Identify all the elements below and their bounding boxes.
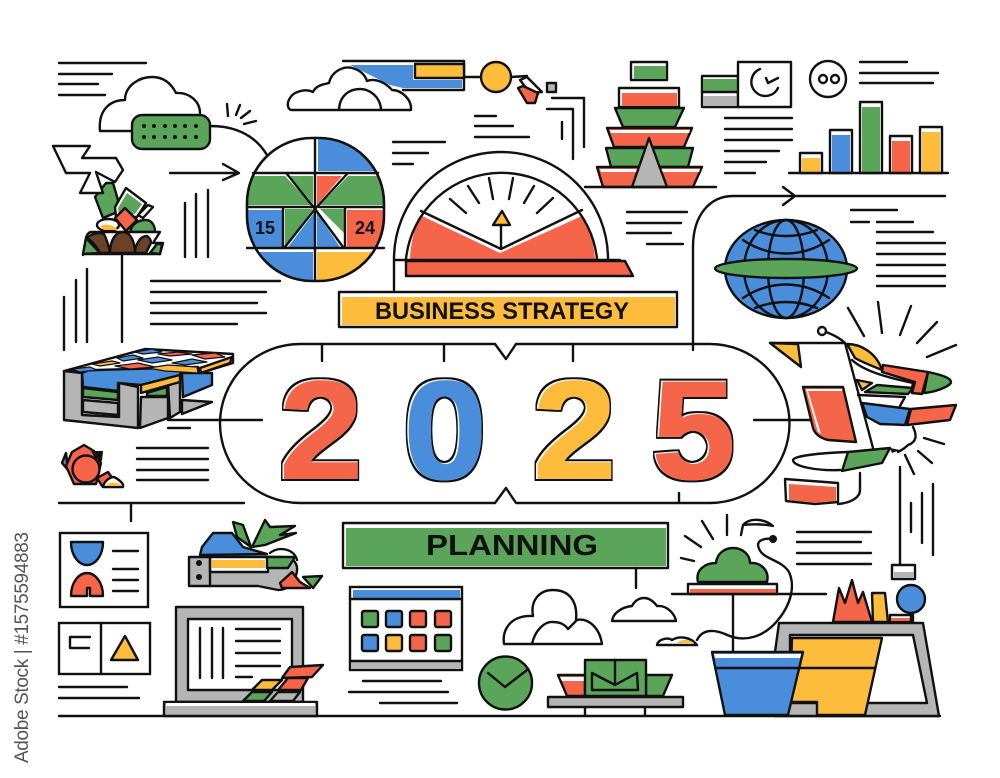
text block: under calendar xyxy=(349,681,457,703)
icon: red blob with yellow tail xyxy=(62,445,123,487)
banner: BUSINESS STRATEGY: BUSINESS STRATEGY xyxy=(375,298,629,325)
text block: top right xyxy=(860,62,938,83)
icon: calendar xyxy=(350,587,462,670)
text block: lower left xyxy=(59,687,139,698)
icon: clock and green box xyxy=(702,62,791,107)
icon: cloud outline top centre xyxy=(288,68,411,110)
card: people profile xyxy=(60,533,148,607)
text block: under clock xyxy=(725,118,792,173)
chart: segmented round dial with numbers 15 and 24 xyxy=(247,138,384,281)
icon: sprout cloud on stand with cable xyxy=(657,515,826,652)
text block: under dial lines xyxy=(151,281,280,324)
heading: 2025 xyxy=(279,352,735,508)
icon: face circle xyxy=(810,61,846,97)
text block: under pyramid xyxy=(627,212,687,244)
chart: bar chart top right xyxy=(789,102,948,173)
text block: right of globe xyxy=(851,210,945,286)
icon: lightning bolt and plant bowl xyxy=(53,146,163,342)
icon: green clock xyxy=(479,656,532,710)
icon: large cloud outline xyxy=(504,590,602,644)
heading: 2025: 2 xyxy=(532,352,616,508)
icon: cloud with green server pill xyxy=(100,77,267,155)
heading: 2025: 2 xyxy=(279,352,362,508)
banner: PLANNING: PLANNING xyxy=(426,530,598,562)
icon: shelf with bowls and envelope xyxy=(548,660,683,716)
side caption: stock number: Adobe Stock | #1575594883 xyxy=(12,532,33,763)
icon: stacked pyramid xyxy=(585,62,716,187)
decorative corner brackets xyxy=(547,98,584,159)
icon: globe with green ring xyxy=(715,220,857,318)
icon: laptop with colour tiles xyxy=(164,607,323,716)
banner: PLANNING xyxy=(343,523,668,568)
ground line xyxy=(59,715,940,717)
icon: twisting ribbon with rays xyxy=(770,302,956,504)
icon: small cloud outline xyxy=(612,598,676,621)
vertical lines group xyxy=(64,190,208,350)
heading: 2025: 5 xyxy=(651,352,735,508)
text block: below box xyxy=(137,428,208,480)
chart: semicircular gauge xyxy=(394,152,633,290)
vertical lines and hanging block xyxy=(892,467,933,579)
icon: pots in gray frame with flames xyxy=(712,580,939,716)
text block: right of sprout xyxy=(797,532,871,564)
card: image thumbnail with mountain xyxy=(59,623,150,674)
icon: blue and yellow bar behind cloud xyxy=(343,61,556,103)
icon: 3D box with checker top xyxy=(64,349,233,428)
text block: above gauge xyxy=(393,116,529,164)
pill frame around 2025 xyxy=(168,344,812,503)
arrow: pointing to segmented chart xyxy=(170,164,239,180)
heading: 2025: 0 xyxy=(403,352,486,508)
divider with tick xyxy=(59,503,244,521)
text block: top left lines xyxy=(59,63,146,95)
banner: BUSINESS STRATEGY xyxy=(339,292,677,327)
arrow: connector from pill to upper right xyxy=(693,187,945,350)
number 24: 24 xyxy=(355,218,375,238)
number 15: 15 xyxy=(255,218,275,238)
icon: device with blue gem and leaves xyxy=(189,520,322,590)
